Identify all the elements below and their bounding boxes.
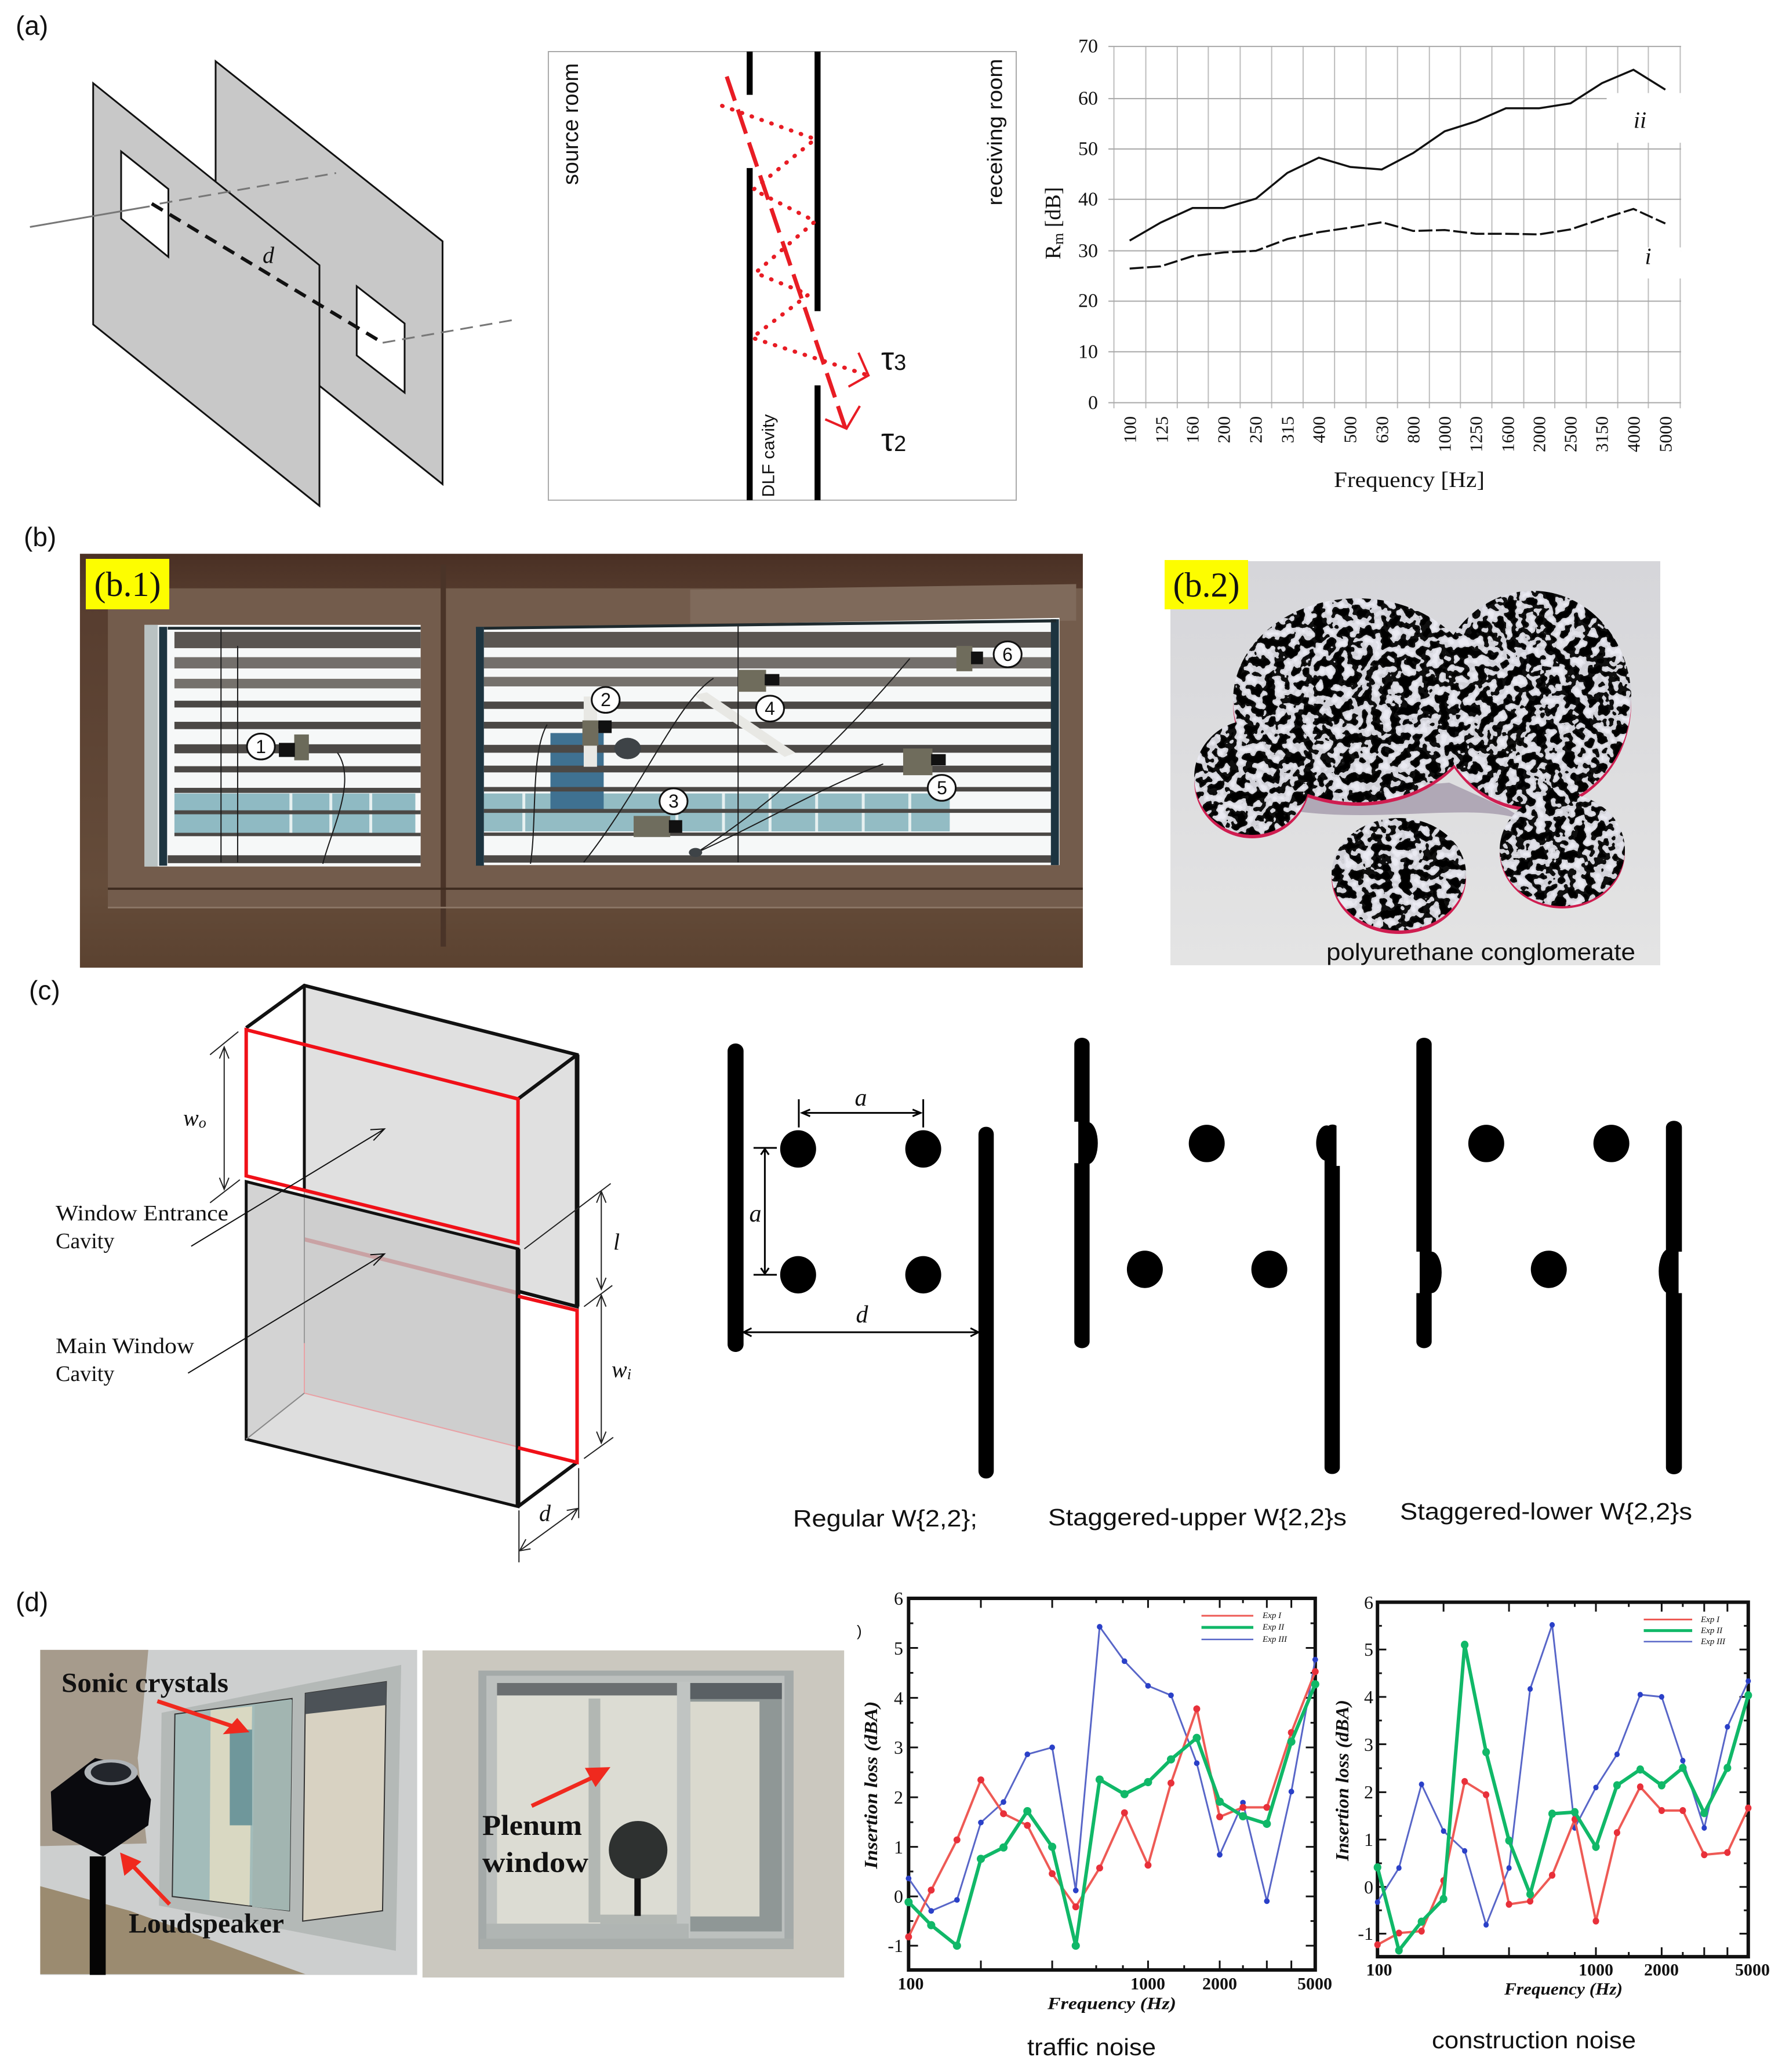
y axis tick labels: 60 [1078,88,1098,109]
x tick labels: 100 [1366,1961,1392,1979]
y axis tick labels: 30 [1078,240,1098,262]
y tick labels: 2 [894,1787,903,1808]
black edges [246,986,577,1507]
x axis tick labels [1120,416,1675,452]
photo: window with blinds and microphones (b.1) [80,554,1083,968]
series red [908,1671,1315,1937]
y axis tick labels: 70 [1078,36,1098,57]
legend text [1700,1615,1726,1646]
y tick labels: 6 [1364,1592,1373,1613]
curve i dashed [1130,209,1665,268]
back plate [216,61,442,484]
x axis tick labels: 4000 [1623,416,1644,452]
left pane glass [144,625,421,867]
series blue [1377,1625,1748,1925]
sensor numbers: 4 [765,698,775,719]
outer frame [478,1671,794,1949]
legend text: Exp II [1700,1626,1723,1635]
dashed direct path tau 2 [727,77,845,428]
y axis tick labels: 0 [1088,392,1098,414]
red window openings [246,1030,577,1462]
dimension labels [183,1105,631,1526]
tau labels: 2 [894,432,906,456]
wall background [423,1651,844,1978]
dimension labels: o [199,1114,206,1130]
grid [1108,46,1681,408]
caption traffic noise: traffic noise [1027,2034,1156,2060]
x axis tick labels: 315 [1278,416,1297,443]
dimension letters: d [856,1302,868,1328]
ray path and distance line [30,173,512,343]
left sash glass [497,1683,678,1924]
building outside [174,733,950,834]
chart: insertion loss construction noise [1332,1592,1770,2053]
leader arrows [188,1129,384,1373]
y axis title: R [1041,245,1065,259]
faint red hidden edges [304,1239,518,1447]
legend text: Exp I [1700,1615,1720,1624]
section frame [548,52,1016,500]
legend lines [1202,1616,1253,1640]
loudspeaker [51,1758,151,1975]
legend text: Exp III [1700,1637,1726,1646]
series green [1377,1645,1748,1950]
label (d): (d) [16,1587,48,1617]
plenum label: window [482,1846,588,1878]
arrangement captions: Regular W{2,2}; [793,1505,977,1532]
facade leaves [747,52,820,500]
axis titles: Insertion loss (dBA) [860,1701,881,1870]
yellow tag b.1 [86,559,169,609]
front plate [93,83,319,506]
x axis tick labels: 2000 [1529,416,1549,452]
legend text: Exp III [1262,1635,1288,1644]
arrangement captions [793,1498,1692,1532]
photo: polyurethane conglomerate discs (b.2) [1165,560,1660,965]
cavity labels: Cavity [56,1362,114,1386]
tau labels [881,340,906,458]
staggered upper arrangement [1074,1038,1340,1474]
room labels: receiving room [983,59,1006,205]
x axis tick labels: 100 [1120,416,1140,443]
arrangement captions: Staggered-lower W{2,2}s [1400,1498,1692,1525]
x tick labels: 2000 [1644,1961,1679,1979]
tau labels: τ [881,421,894,458]
dimension labels: i [627,1366,631,1382]
left sash glass [172,1699,292,1911]
plenum label [482,1809,588,1878]
sensor numbers [256,644,1013,812]
right sash glass [303,1682,386,1921]
disc shadow [1299,783,1530,823]
x axis tick labels: 250 [1245,416,1266,443]
regular dimensions [744,1099,979,1336]
dimension letters: a [749,1201,762,1227]
y tick labels: -1 [888,1935,903,1956]
series red [1377,1782,1748,1944]
axis titles: Frequency (Hz) [1504,1979,1623,1999]
x axis tick labels: 3150 [1592,416,1612,452]
photo: sonic crystal window with loudspeaker [40,1650,417,1975]
diagram: sonic crystal arrangements [728,1038,1692,1532]
tau labels: τ [881,340,894,377]
y tick labels: -1 [1358,1923,1373,1944]
y axis tick labels [1078,36,1098,414]
regular arrangement [728,1044,994,1478]
distance label d: d [263,242,275,268]
legend text [1262,1611,1288,1644]
room labels: source room [559,63,583,185]
y axis tick labels: 40 [1078,189,1098,210]
stray mark: ) [857,1622,862,1640]
y tick labels: 6 [894,1588,903,1609]
yellow tag b.2: (b.2) [1173,566,1239,604]
window frame [108,588,1083,907]
yellow tag b.1: (b.1) [94,565,161,604]
diagram: window cavity geometry [56,986,631,1562]
x axis tick labels: 1250 [1465,416,1486,452]
label (b): (b) [24,522,56,552]
back wall [304,986,577,1447]
x tick labels: 1000 [1579,1961,1613,1979]
photo: plenum window [423,1651,844,1978]
legend text: Exp II [1262,1623,1285,1632]
sensor numbers: 3 [668,791,679,812]
y tick labels: 0 [1364,1877,1373,1897]
y tick labels: 4 [1364,1686,1373,1707]
y tick labels: 1 [1364,1829,1373,1850]
room labels [559,59,1006,497]
legend text: Exp I [1262,1611,1282,1620]
x tick labels [1366,1961,1770,1979]
y tick labels: 2 [1364,1782,1373,1802]
y tick labels [888,1588,903,1956]
y tick labels: 5 [1364,1639,1373,1660]
panel: two parallel plates with apertures [30,61,512,506]
dimension labels: l [613,1229,620,1255]
yellow tag b.2 [1165,560,1248,609]
microphones [279,646,983,857]
x axis title: Frequency [Hz] [1334,468,1485,492]
y tick labels: 4 [894,1688,903,1709]
photo labels: Loudspeaker [129,1909,284,1939]
wall background [40,1650,417,1975]
dimension letters: a [854,1085,867,1111]
y tick labels: 3 [1364,1734,1373,1755]
back aperture [357,286,405,392]
x axis tick labels: 5000 [1656,416,1675,452]
cavity labels: Main Window [56,1334,195,1358]
window frame [159,1665,401,1951]
right pane glass [476,618,1060,865]
dimension letters [749,1085,868,1328]
x axis tick labels: 2500 [1561,416,1580,452]
y tick labels: 1 [894,1837,903,1857]
cavity labels [56,1201,228,1386]
panel: double leaf facade section [548,52,1016,500]
x axis tick labels: 400 [1309,416,1329,443]
red arrow [532,1767,610,1806]
curve label i: i [1645,243,1652,269]
chart: sound reduction vs frequency [1041,36,1681,492]
sensor numbers: 6 [1002,644,1013,665]
y axis tick labels: 50 [1078,138,1098,160]
pane edges [159,619,1059,866]
plot box and ticks [908,1598,1315,1970]
x axis tick labels: 200 [1214,416,1234,443]
x axis tick labels: 800 [1403,416,1424,443]
axis titles: Frequency (Hz) [1047,1994,1176,2013]
x axis tick labels: 500 [1340,416,1360,443]
photo labels: Sonic crystals [61,1667,228,1699]
staggered lower arrangement [1416,1038,1682,1474]
wires [221,626,910,864]
caption construction noise: construction noise [1432,2027,1636,2053]
conglomerate discs [1434,591,1631,808]
y axis tick labels: 10 [1078,341,1098,363]
chart: insertion loss traffic noise [857,1588,1332,2060]
x axis tick labels: 630 [1372,416,1392,443]
dimension labels: w [612,1357,627,1382]
sensor numbers: 1 [256,736,266,757]
pink disc edges [1194,594,1631,934]
axis titles [860,1701,1176,2013]
legend lines [1644,1620,1692,1642]
x tick labels: 5000 [1297,1975,1332,1993]
x axis tick labels: 125 [1151,416,1172,443]
y tick labels: 0 [894,1886,903,1907]
sensor numbers: 2 [601,689,611,710]
cavity labels: Cavity [56,1229,114,1253]
dimension lines [210,1031,613,1562]
red arrows [120,1701,249,1904]
caption: polyurethane conglomerate [1326,939,1635,965]
series green [908,1684,1315,1946]
y axis title: m [1049,233,1067,245]
white sensor rods [584,692,795,767]
y tick labels: 3 [894,1737,903,1758]
reflected loudspeaker [609,1821,667,1916]
dotted reflected path tau 3 [722,106,865,375]
y axis tick labels: 20 [1078,290,1098,312]
x axis tick labels: 160 [1183,416,1202,443]
number circles [247,641,1021,815]
label (a): (a) [16,10,48,41]
x axis tick labels: 1000 [1434,416,1455,452]
axis titles [1332,1700,1623,1999]
room labels: DLF cavity [759,414,778,497]
x tick labels [897,1975,1332,1993]
tau labels: 3 [894,351,906,375]
arrowheads [825,352,868,428]
right sash glass [690,1683,782,1932]
wall [80,554,1083,968]
series blue [908,1627,1315,1911]
axis titles: Insertion loss (dBA) [1332,1700,1352,1862]
photo labels [61,1667,284,1939]
dimension labels: d [539,1500,551,1526]
front lower panel [246,1182,518,1507]
plot box and ticks [1377,1602,1748,1957]
sensor numbers: 5 [937,777,947,798]
y axis title: [dB] [1041,187,1065,233]
label (c): (c) [29,975,60,1005]
y tick labels: 5 [894,1638,903,1659]
blind slats [168,632,1056,863]
x tick labels: 5000 [1735,1961,1770,1979]
x tick labels: 2000 [1202,1975,1237,1993]
dimension labels: w [183,1105,199,1130]
cavity labels: Window Entrance [56,1201,228,1226]
curve label ii: ii [1634,107,1646,133]
x tick labels: 1000 [1130,1975,1165,1993]
window sill [486,1924,689,1939]
curve ii solid [1130,70,1665,241]
y tick labels [1358,1592,1373,1944]
x axis tick labels: 1600 [1498,416,1518,452]
plenum label: Plenum [482,1809,582,1841]
x tick labels: 100 [897,1975,924,1993]
arrangement captions: Staggered-upper W{2,2}s [1048,1504,1347,1531]
mullion [677,1682,690,1938]
cavity floor [246,1393,518,1507]
